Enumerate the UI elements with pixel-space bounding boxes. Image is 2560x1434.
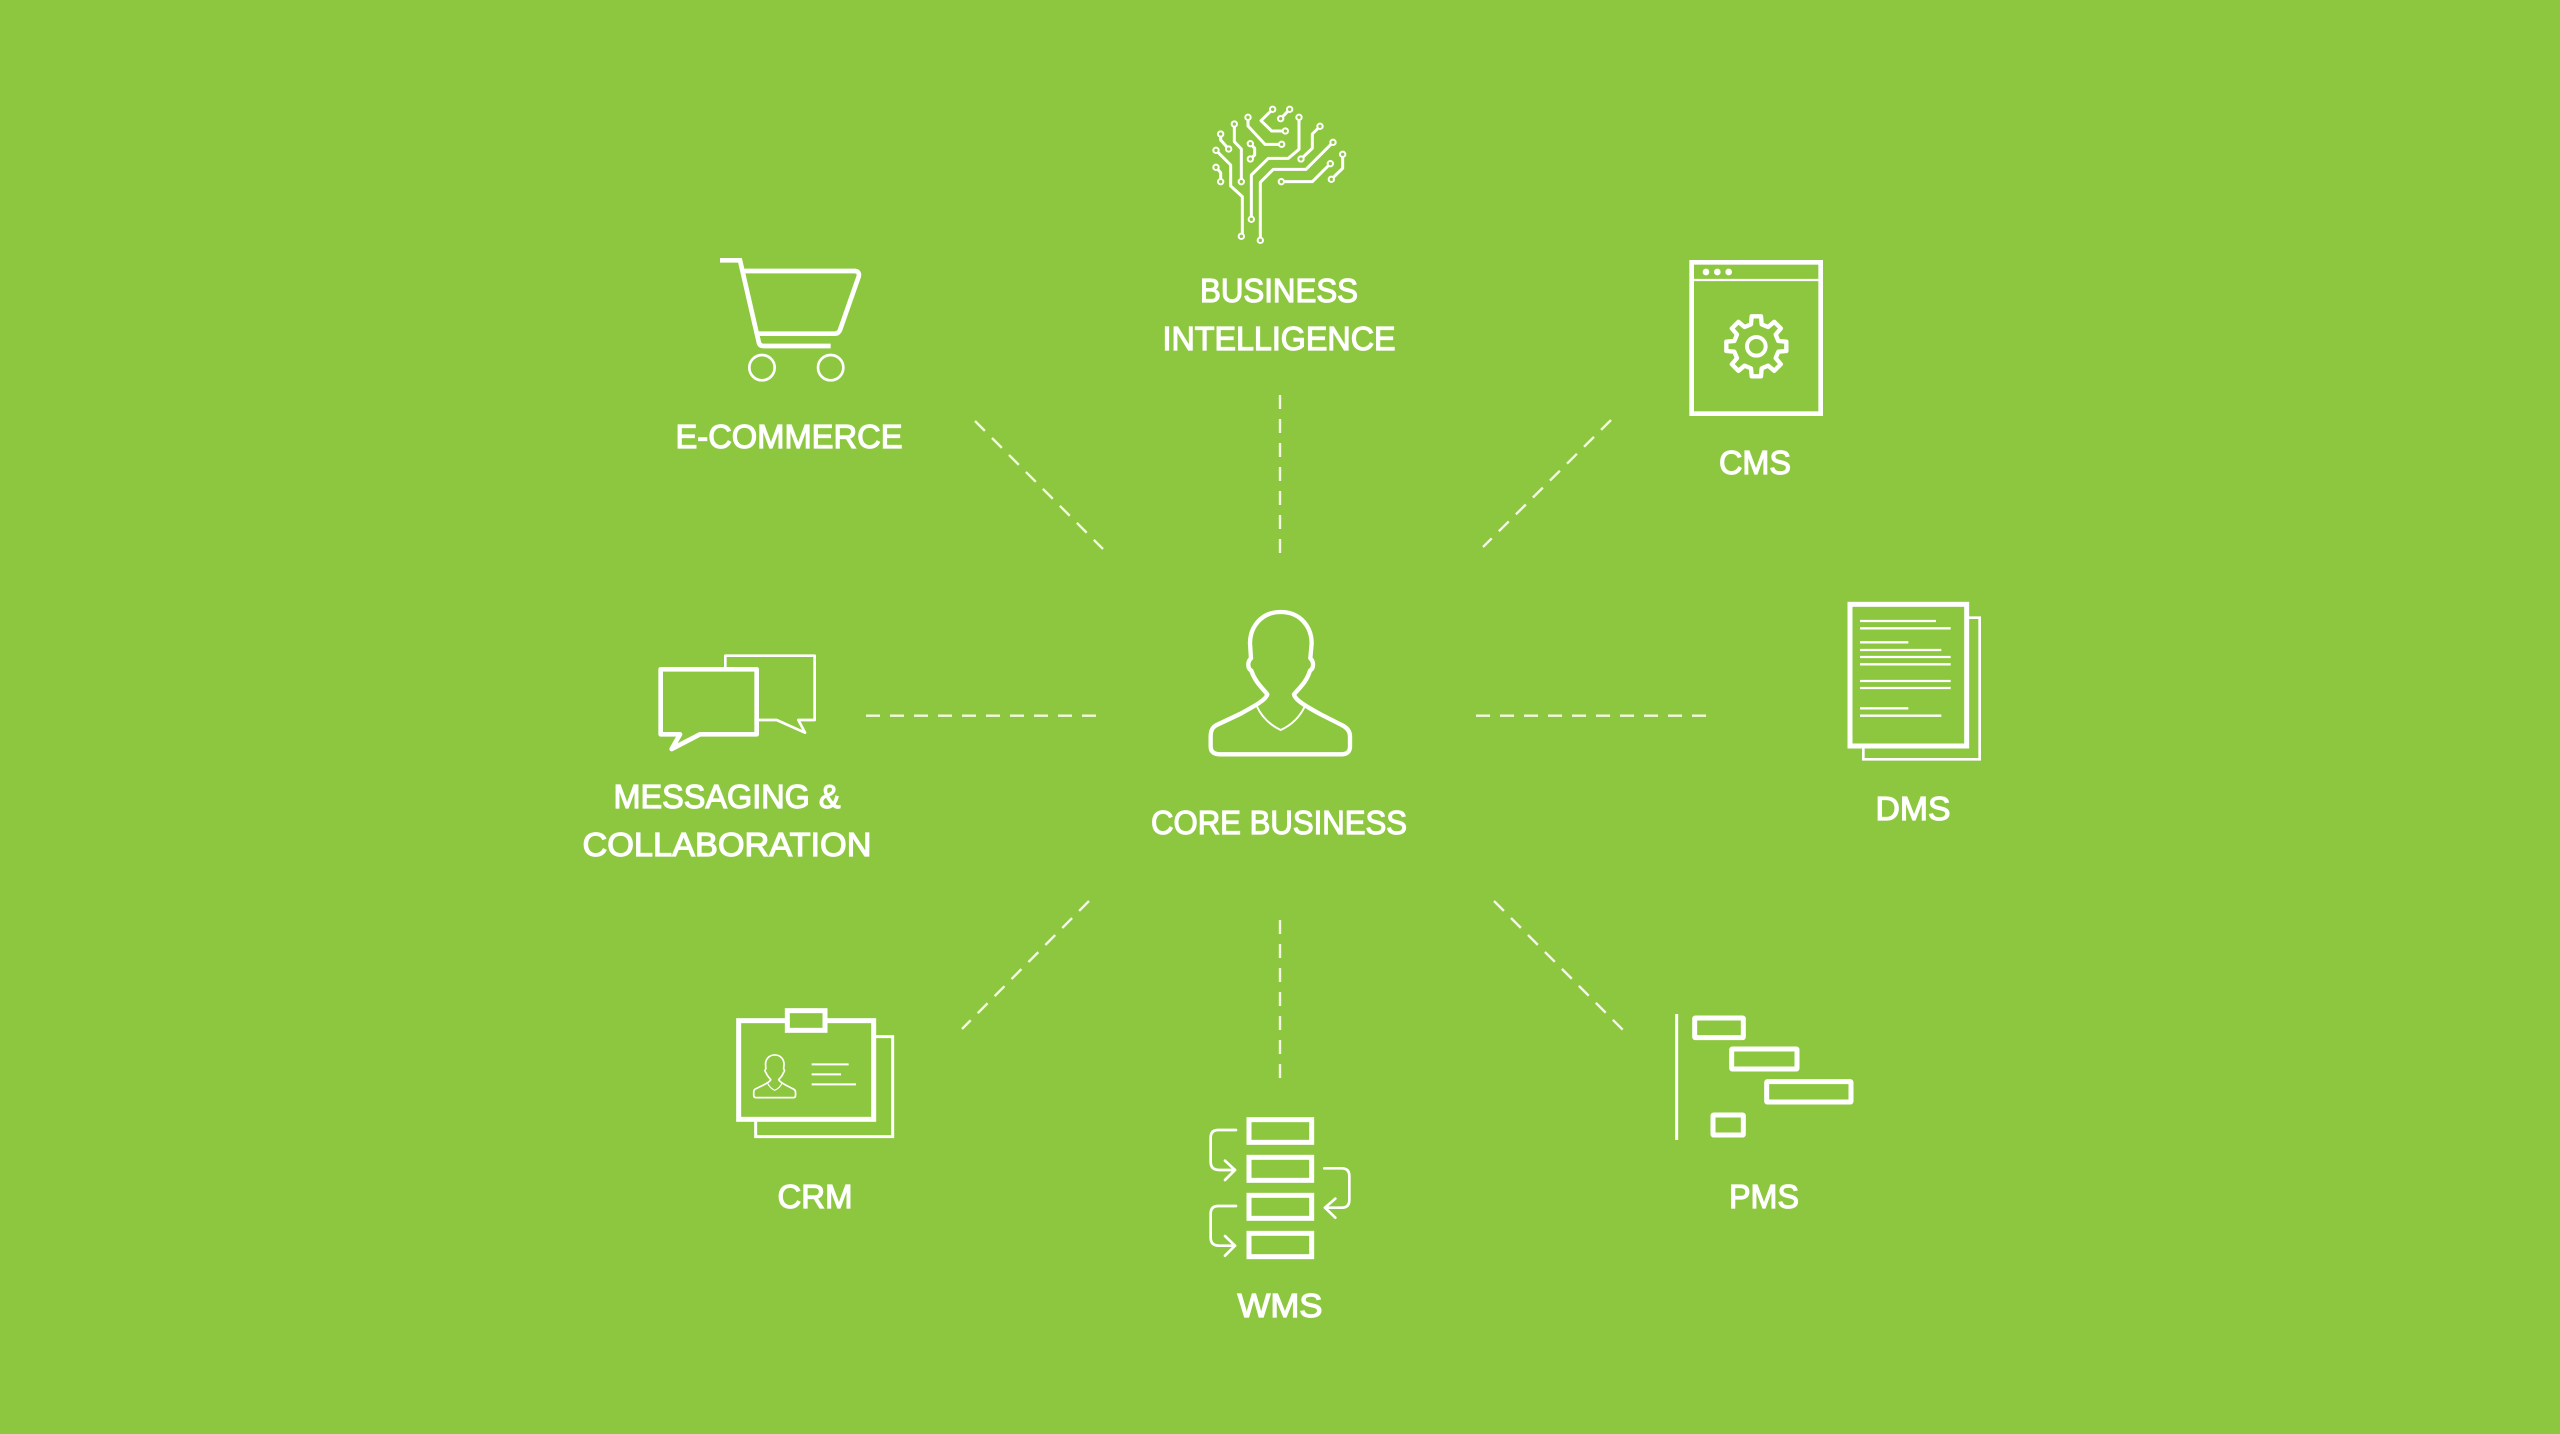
panel: messaging and collaboration <box>582 656 872 864</box>
heading: core business: CORE BUSINESS <box>1151 805 1407 842</box>
label: messaging and collaboration <box>582 779 872 864</box>
icon: browser window with gear <box>1692 262 1821 414</box>
icon: workflow stack <box>1211 1120 1349 1257</box>
icon: speech bubbles <box>661 656 815 749</box>
connector: core to messaging <box>866 715 1098 717</box>
panel: WMS <box>1211 1120 1349 1325</box>
panel: PMS <box>1677 1014 1851 1216</box>
connector: core to PMS <box>1494 901 1623 1030</box>
icon: contact card <box>739 1011 893 1137</box>
label: messaging and collaboration: COLLABORATION <box>582 827 872 864</box>
label: e-commerce: E-COMMERCE <box>676 419 902 456</box>
icon: person <box>1211 612 1350 754</box>
label: PMS: PMS <box>1729 1179 1799 1216</box>
icon: gantt chart <box>1677 1014 1851 1140</box>
panel: business intelligence <box>1162 107 1396 358</box>
label: CMS: CMS <box>1719 445 1791 482</box>
panel: DMS <box>1850 604 1980 828</box>
panel: core business <box>1151 612 1407 842</box>
label: WMS: WMS <box>1238 1288 1322 1325</box>
connector: core to CMS <box>1483 420 1611 547</box>
label: business intelligence: INTELLIGENCE <box>1162 321 1396 358</box>
label: messaging and collaboration: MESSAGING & <box>614 779 840 816</box>
panel: CMS <box>1692 262 1821 482</box>
panel: e-commerce <box>676 260 902 456</box>
connector: core to DMS <box>1476 715 1708 717</box>
connector: core to business intelligence <box>1279 395 1281 555</box>
icon: shopping cart <box>720 260 859 380</box>
connector: core to e-commerce <box>975 421 1103 549</box>
label: DMS: DMS <box>1876 791 1950 828</box>
label: business intelligence: BUSINESS <box>1200 273 1358 310</box>
label: business intelligence <box>1162 273 1396 358</box>
icon: documents <box>1850 604 1980 759</box>
panel: CRM <box>739 1011 893 1216</box>
icon: circuit tree <box>1213 107 1345 243</box>
connector: core to CRM <box>962 901 1089 1029</box>
connector: core to WMS <box>1279 920 1281 1079</box>
label: CRM: CRM <box>778 1179 852 1216</box>
